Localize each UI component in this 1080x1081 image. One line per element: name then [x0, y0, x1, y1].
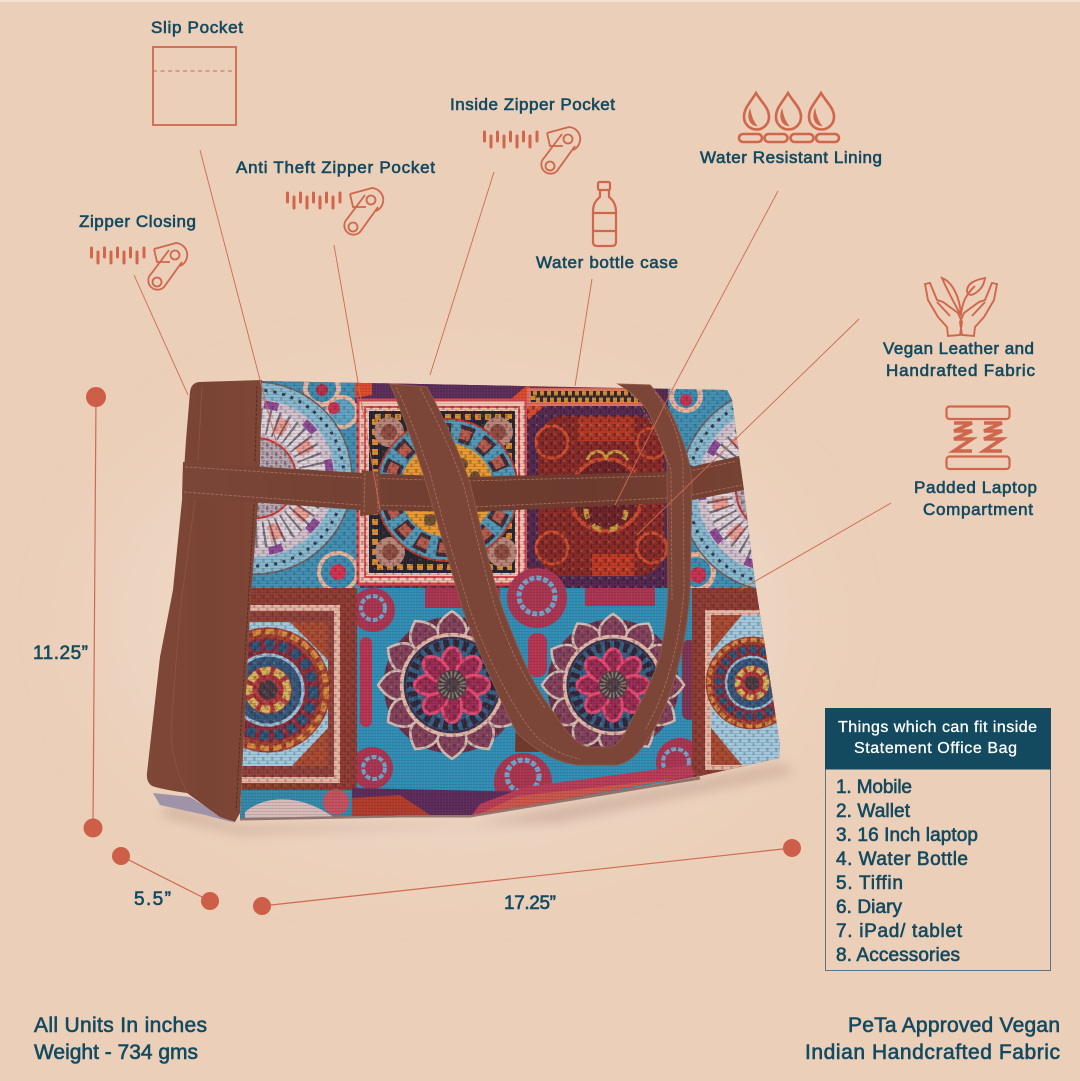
- panel header: [825, 708, 1051, 770]
- list of items: 7. iPad/ tablet: [836, 921, 963, 942]
- width dimension: 17.25”: [504, 893, 556, 914]
- depth dimension: 5.5”: [134, 889, 171, 910]
- list of items: 5. Tiffin: [836, 873, 903, 894]
- depth dimension: [112, 847, 219, 910]
- bottom fabric strip under fold: [153, 793, 235, 823]
- list of items: [836, 777, 978, 966]
- vegan leather callout: Vegan Leather and: [883, 339, 1034, 358]
- water bottle case callout: Water bottle case: [536, 253, 678, 272]
- list of items: 4. Water Bottle: [836, 849, 968, 870]
- icon: zipper: [92, 243, 187, 290]
- anti theft zipper pocket callout: Anti Theft Zipper Pocket: [236, 158, 435, 177]
- back tag: [515, 715, 560, 752]
- panel: things which fit inside: [825, 708, 1051, 970]
- water resistant lining callout: Water Resistant Lining: [700, 148, 882, 167]
- panel header: Things which can fit inside: [838, 719, 1037, 736]
- lower tile: left: [241, 588, 357, 793]
- footer right: material notes: Indian Handcrafted Fabric: [805, 1041, 1060, 1064]
- callout lines over bag: [134, 150, 891, 590]
- belt loop: [360, 470, 381, 516]
- footer left: units and weight: Weight - 734 gms: [34, 1041, 198, 1064]
- inside zipper pocket callout: Inside Zipper Pocket: [450, 95, 615, 114]
- lower tile: right: [692, 588, 780, 778]
- fine pattern overlay on upper tiles: [355, 405, 670, 590]
- footer left: units and weight: [34, 1014, 207, 1064]
- icon: zipper: [484, 127, 580, 174]
- height dimension: 11.25”: [33, 643, 88, 664]
- panel header: Statement Office Bag: [854, 740, 1017, 757]
- bag shadow: [160, 764, 795, 834]
- zipper closing callout: [79, 212, 196, 290]
- footer right: material notes: PeTa Approved Vegan: [848, 1014, 1060, 1037]
- icon: zipper: [288, 188, 383, 235]
- list of items: 2. Wallet: [836, 801, 911, 822]
- padded laptop compartment callout: Compartment: [923, 500, 1033, 519]
- upper tile: orange medallion: [355, 381, 530, 584]
- icon: hands with leaves: [925, 278, 997, 336]
- list of items: 1. Mobile: [836, 777, 912, 798]
- strap: [390, 384, 692, 765]
- list of items: 6. Diary: [836, 897, 902, 918]
- icon: padded spring: [946, 406, 1010, 469]
- upper tile: blue medallion left: [252, 381, 360, 588]
- water resistant lining callout: [700, 93, 882, 167]
- zipper closing callout: Zipper Closing: [79, 212, 196, 231]
- padded laptop compartment callout: [914, 406, 1037, 519]
- bag: [134, 150, 891, 834]
- anti theft zipper pocket callout: [236, 158, 435, 235]
- bottom strip: [240, 765, 695, 820]
- inside zipper pocket callout: [450, 95, 615, 174]
- padded laptop compartment callout: Padded Laptop: [914, 478, 1037, 497]
- footer right: material notes: [805, 1014, 1060, 1064]
- slip pocket callout: [151, 18, 243, 125]
- upper tile: red pattern: [527, 388, 677, 592]
- icon: water bottle: [593, 182, 616, 246]
- vegan leather callout: Handrafted Fabric: [886, 361, 1036, 380]
- belt: [182, 456, 744, 516]
- list of items: 3. 16 Inch laptop: [836, 825, 978, 846]
- slip pocket callout: Slip Pocket: [151, 18, 243, 37]
- icon: water drops: [739, 93, 839, 142]
- vegan leather callout: [883, 278, 1036, 380]
- list of items: 8. Accessories: [836, 945, 960, 966]
- height dimension: [33, 387, 106, 838]
- water bottle case callout: [536, 182, 678, 272]
- fabric panel: [240, 381, 780, 818]
- lower tile: blue with mandalas: [351, 568, 704, 811]
- width dimension: [253, 839, 801, 915]
- icon: slip pocket: [153, 47, 236, 125]
- leather side panel: [147, 380, 262, 822]
- upper tile: blue medallion right: [668, 388, 757, 593]
- footer left: units and weight: All Units In inches: [34, 1014, 207, 1037]
